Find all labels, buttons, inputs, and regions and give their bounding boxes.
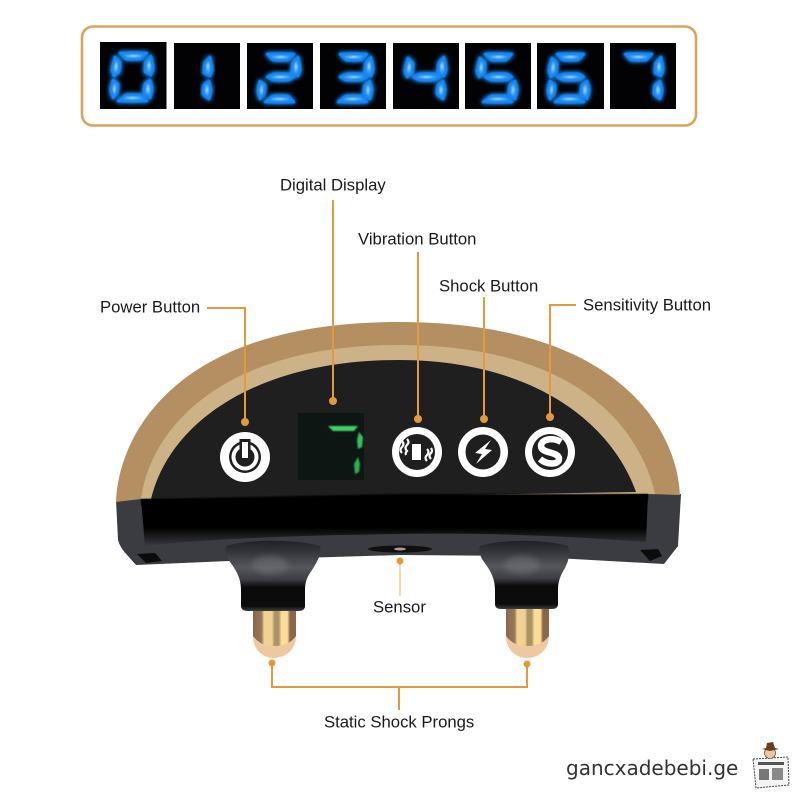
black face (151, 360, 636, 499)
callout: static shock prongs: Static Shock Prongs (324, 712, 474, 732)
lower housing (116, 488, 681, 565)
digit 0 (100, 42, 166, 109)
screw slot left (137, 553, 162, 563)
digit 6 (537, 43, 604, 109)
callout: sensitivity button: Sensitivity Button (583, 296, 711, 314)
digit 3 (320, 43, 386, 109)
watermark text: gancxadebebi.ge (566, 756, 738, 780)
callout: power button: Power Button (100, 298, 200, 316)
callout: sensor: Sensor (373, 598, 426, 616)
callout: static shock prongs (268, 660, 530, 732)
digit 4 (393, 43, 459, 109)
callout: sensor (373, 558, 426, 616)
digital display window (298, 413, 364, 480)
sensor slot (368, 546, 432, 552)
recessed black band (141, 492, 648, 546)
icon: sensitivity button (525, 427, 575, 477)
icon: power button (220, 432, 270, 482)
icon: newspaper reader mascot (753, 742, 789, 788)
icon: vibration button (392, 427, 442, 477)
callout: sensitivity button (546, 296, 711, 421)
digit 1 (174, 43, 240, 109)
callout: digital display: Digital Display (280, 176, 386, 194)
device: collar receiver (116, 322, 681, 658)
screw slot right (640, 549, 662, 561)
inner light tan band (141, 345, 655, 499)
left prong (225, 541, 320, 658)
callout: shock button (439, 276, 538, 423)
callout: digital display (280, 176, 386, 405)
panel: digit display strip (82, 26, 696, 126)
digit 5 (465, 43, 531, 109)
callout: vibration button (358, 230, 476, 423)
right prong (479, 541, 569, 658)
callout: vibration button: Vibration Button (358, 230, 476, 248)
icon: shock button (458, 427, 508, 477)
callout: shock button: Shock Button (439, 276, 538, 296)
outer tan shell (116, 322, 680, 502)
digit 7 (610, 43, 676, 109)
digit 2 (247, 43, 313, 109)
callout: power button (100, 298, 249, 426)
